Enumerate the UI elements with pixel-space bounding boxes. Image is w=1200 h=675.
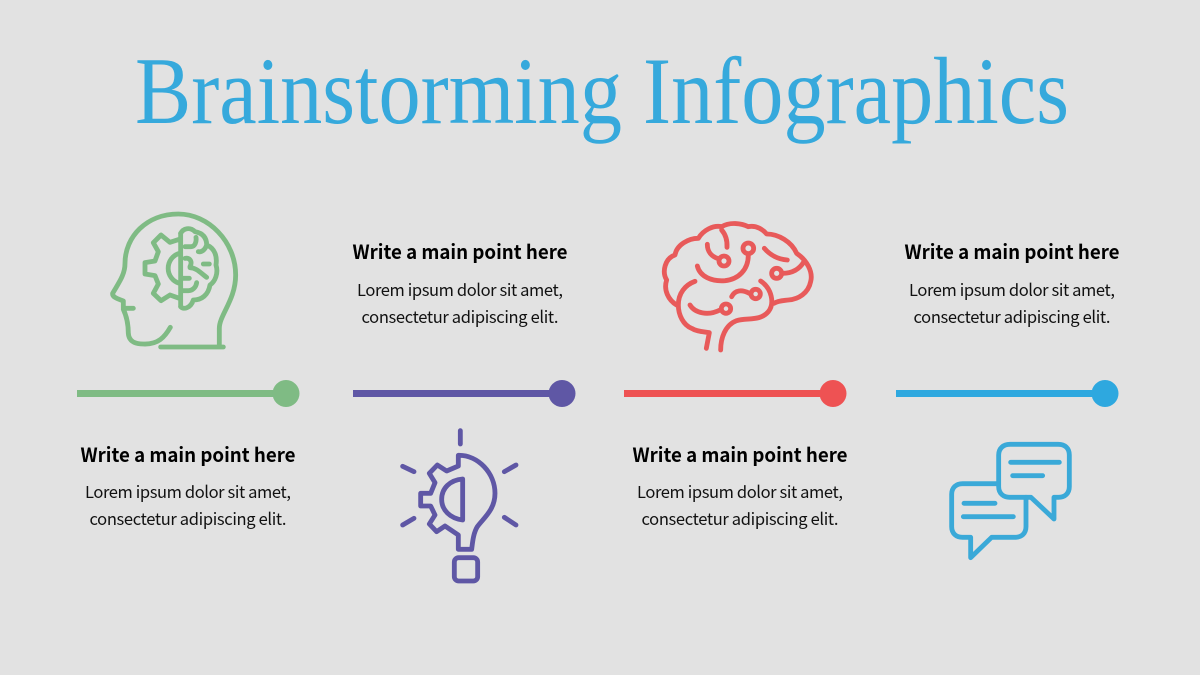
timeline: green segment bbox=[77, 380, 300, 407]
text block: point 1: Lorem ipsum dolor sit amet, bbox=[85, 479, 291, 503]
text block: point 4: Write a main point here bbox=[904, 237, 1120, 265]
text block: point 3: Write a main point here bbox=[632, 440, 848, 468]
text block: point 1 bbox=[80, 440, 296, 530]
icon: head with gear and brain bbox=[113, 214, 236, 347]
timeline: purple segment bbox=[353, 380, 576, 407]
text block: point 3: consectetur adipiscing elit. bbox=[642, 506, 838, 530]
icon: gear light bulb bbox=[403, 431, 516, 581]
title: Brainstorming Infographics bbox=[135, 38, 1069, 144]
text block: point 1: consectetur adipiscing elit. bbox=[90, 506, 286, 530]
text block: point 4 bbox=[904, 237, 1120, 328]
text block: point 3 bbox=[632, 440, 848, 530]
text block: point 4: consectetur adipiscing elit. bbox=[914, 304, 1110, 328]
text block: point 3: Lorem ipsum dolor sit amet, bbox=[637, 479, 843, 503]
timeline: red segment bbox=[624, 380, 846, 407]
text block: point 1: Write a main point here bbox=[80, 440, 296, 468]
icon: brain with circuit nodes bbox=[664, 224, 811, 350]
text block: point 2: Lorem ipsum dolor sit amet, bbox=[357, 277, 563, 301]
text block: point 2: Write a main point here bbox=[352, 237, 568, 265]
icon: speech bubbles bbox=[952, 444, 1069, 558]
timeline: blue segment bbox=[896, 380, 1118, 407]
text block: point 2 bbox=[352, 237, 568, 328]
text block: point 2: consectetur adipiscing elit. bbox=[362, 304, 558, 328]
text block: point 4: Lorem ipsum dolor sit amet, bbox=[909, 277, 1115, 301]
